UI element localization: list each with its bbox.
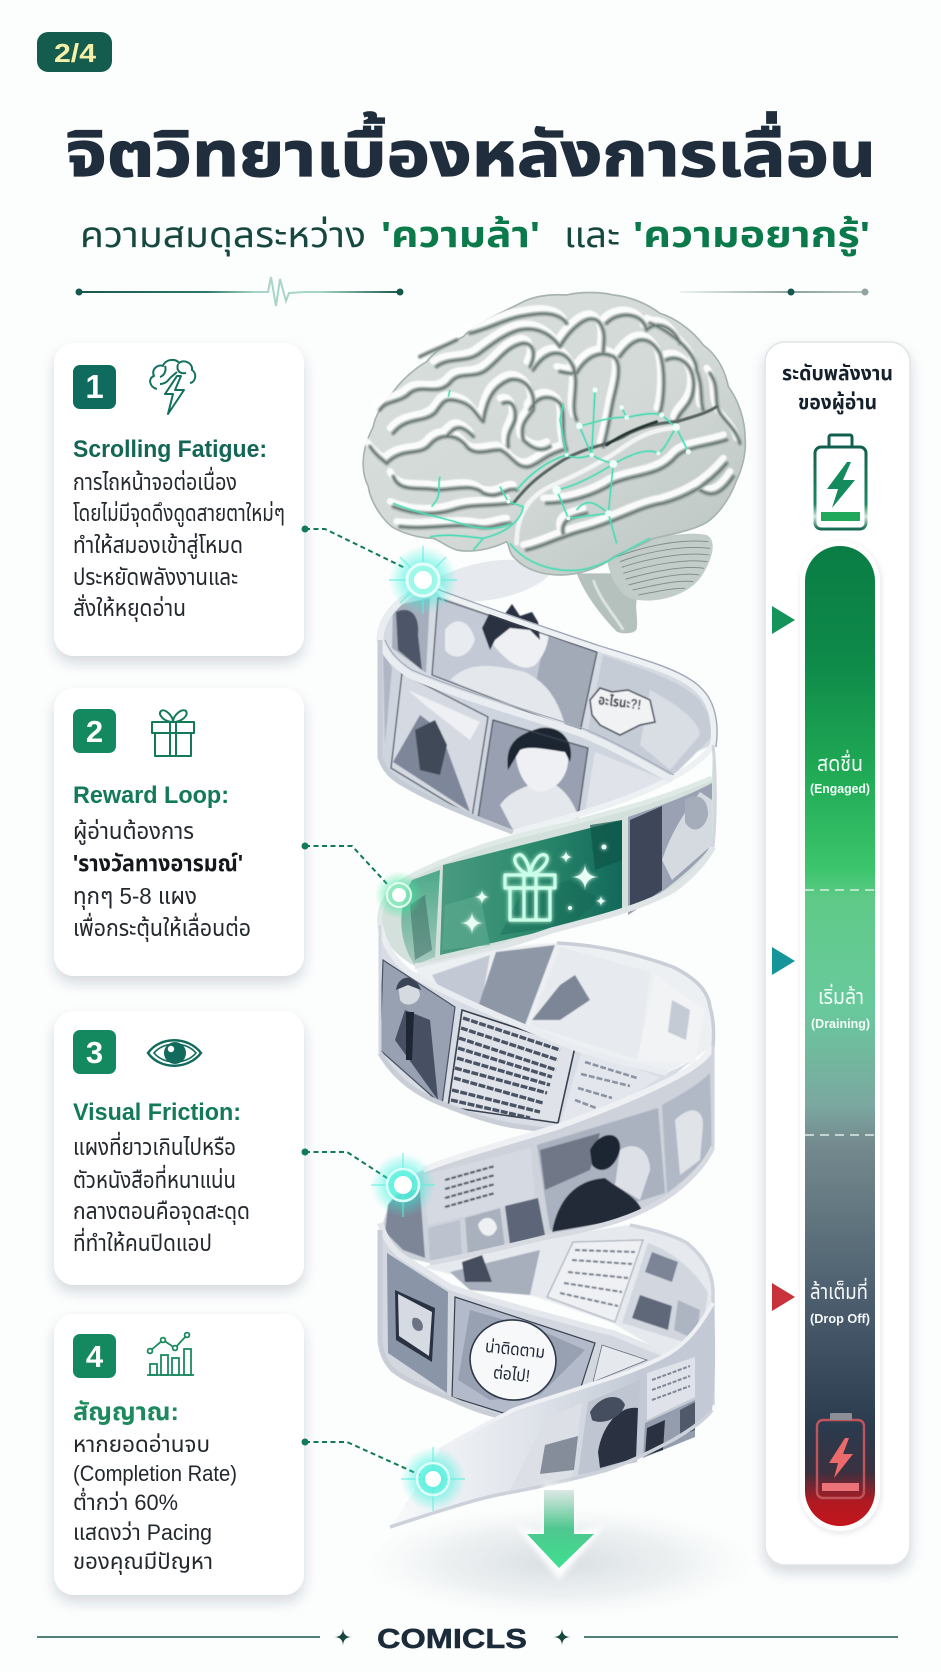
card 3: visual friction	[54, 1011, 308, 1285]
body text: ตัวหนังสือที่หนาแน่น	[73, 1164, 236, 1193]
body text: สั่งให้หยุดอ่าน	[73, 593, 186, 622]
icon: gift	[152, 710, 194, 756]
marker: engaged	[772, 606, 795, 634]
icon: eye	[148, 1040, 201, 1066]
number badge 3: 3	[86, 1035, 103, 1070]
stage label: engaged: (Engaged)	[810, 781, 870, 796]
neural nodes	[507, 388, 691, 520]
number badge 4	[73, 1334, 116, 1378]
speech bubble: keep reading: น่าติดตาม	[484, 1337, 546, 1362]
card 2: reward loop	[54, 688, 308, 976]
icon: low battery	[817, 1413, 864, 1498]
body text: ของคุณมีปัญหา	[73, 1549, 213, 1575]
ribbon: top loop glass rails	[380, 589, 717, 832]
stage label: engaged: สดชื่น	[817, 749, 863, 776]
sparkles on reward band	[460, 844, 607, 935]
rail of third loop back wall	[557, 943, 714, 1047]
rail of lower loop back wall	[630, 1225, 713, 1405]
rails of fourth band	[423, 1047, 713, 1263]
badge: page 2/4: 2/4	[54, 38, 97, 68]
panel heading: ของผู้อ่าน	[798, 392, 877, 414]
body text: การไถหน้าจอต่อเนื่อง	[73, 466, 237, 495]
marker 1: cyan glow node	[389, 546, 457, 614]
stage label: draining	[811, 983, 870, 1031]
stage label: drop off: ล้าเต็มที่	[810, 1277, 868, 1304]
energy gradient bar	[800, 541, 880, 1531]
body text: หากยอดอ่านจบ	[73, 1432, 210, 1457]
brain illustration	[363, 292, 745, 633]
body text: 'รางวัลทางอารมณ์'	[73, 850, 243, 876]
shadow pool under ribbon	[365, 1506, 755, 1618]
speech bubble: what?!: อะไรนะ?!	[598, 691, 642, 713]
icon: glowing gift on ribbon	[505, 855, 555, 920]
body text	[73, 1131, 250, 1256]
number badge 1: 1	[85, 368, 104, 405]
marker: draining	[772, 947, 795, 975]
body text: ที่ทำให้คนปิดแอป	[73, 1227, 212, 1256]
body text: เพื่อกระตุ้นให้เลื่อนต่อ	[73, 912, 251, 942]
footer brand line: COMICLS	[377, 1623, 527, 1654]
callout connectors	[305, 529, 420, 1475]
marker 3: cyan glow node	[371, 1153, 435, 1217]
ribbon: highlighted green reward band	[380, 745, 715, 966]
number badge 4: 4	[86, 1339, 104, 1374]
body text: ทำให้สมองเข้าสู่โหมด	[73, 532, 243, 560]
stage label: drop off: (Drop Off)	[810, 1311, 870, 1326]
body text: กลางตอนคือจุดสะดุด	[73, 1198, 250, 1225]
body text: ผู้อ่านต้องการ	[73, 818, 194, 846]
number badge 1	[73, 365, 116, 409]
speech bubble: keep reading	[465, 1314, 561, 1406]
cerebrum body	[363, 292, 745, 575]
card 1: scrolling fatigue	[54, 343, 308, 656]
neural network glow lines	[393, 390, 688, 571]
gyri shading	[367, 308, 740, 550]
marker 4: cyan glow node	[401, 1447, 465, 1511]
ribbon: fifth band with speech bubble	[380, 1223, 663, 1417]
subtitle: 'ความล้า'	[381, 214, 540, 255]
panel: reader energy meter	[765, 342, 910, 1565]
body text: ประหยัดพลังงานและ	[73, 564, 238, 590]
icon: brain with lightning	[150, 360, 195, 414]
ribbon: back wall of lower loop	[423, 1225, 713, 1410]
stage label: engaged	[810, 749, 870, 796]
body text: โดยไม่มีจุดดึงดูดสายตาใหม่ๆ	[73, 500, 285, 528]
marker 2: green glow node	[375, 871, 423, 919]
subtitle: และ	[564, 214, 620, 255]
body text	[73, 1432, 237, 1575]
number badge 2: 2	[86, 714, 103, 749]
brain stem	[577, 573, 637, 633]
arrow: downward continuation	[516, 1484, 604, 1580]
body text: (Completion Rate)	[73, 1461, 237, 1486]
body text: ทุกๆ 5-8 แผง	[73, 883, 197, 910]
sylvian fissure	[513, 407, 717, 543]
panel: dense text block	[448, 1010, 575, 1123]
ribbon: fourth band descending from right	[381, 1047, 713, 1263]
heading: Visual Friction:	[73, 1099, 241, 1126]
stage label: draining: เริ่มล้า	[818, 983, 864, 1009]
stage label: drop off	[810, 1277, 870, 1326]
panel heading: ระดับพลังงาน	[782, 363, 893, 385]
film ribbon spiral illustration	[380, 560, 717, 1527]
body text: แผงที่ยาวเกินไปหรือ	[73, 1131, 236, 1160]
icon: growth bar chart	[147, 1333, 194, 1375]
ribbon: top back band with panels	[380, 590, 714, 790]
cerebellum	[607, 534, 713, 601]
footer brand line	[37, 1623, 898, 1654]
badge: page 2/4	[37, 32, 112, 72]
card 4: signal	[54, 1314, 308, 1595]
heading: Scrolling Fatigue:	[73, 436, 267, 463]
icon: battery with bolt	[815, 435, 866, 529]
divider with heartbeat line	[76, 277, 868, 306]
body text: แสดงว่า Pacing	[73, 1520, 212, 1545]
subtitle: ความสมดุลระหว่าง	[80, 214, 366, 256]
subtitle	[80, 214, 870, 256]
ribbon: faded back wall of third loop	[417, 943, 714, 1073]
number badge 3	[73, 1030, 116, 1074]
panel heading	[782, 363, 893, 414]
heading: สัญญาณ:	[73, 1398, 179, 1426]
speech bubble: keep reading: ต่อไป!	[492, 1363, 531, 1386]
body text	[73, 466, 285, 622]
number badge 2	[73, 709, 116, 753]
title: จิตวิทยาเบื้องหลังการเลื่อน	[66, 111, 876, 190]
ribbon: faint back strip behind brain	[437, 560, 553, 601]
heading: Reward Loop:	[73, 782, 229, 809]
subtitle: 'ความอยากรู้'	[633, 214, 870, 256]
ribbon: tail band fading toward last marker	[390, 1303, 715, 1527]
ribbon: second front band	[380, 637, 713, 832]
body text: ต่ำกว่า 60%	[73, 1487, 178, 1515]
body text	[73, 818, 251, 942]
marker: drop off	[772, 1283, 795, 1311]
ribbon: third front band with dense text panel	[380, 925, 690, 1133]
stage label: draining: (Draining)	[811, 1016, 870, 1031]
